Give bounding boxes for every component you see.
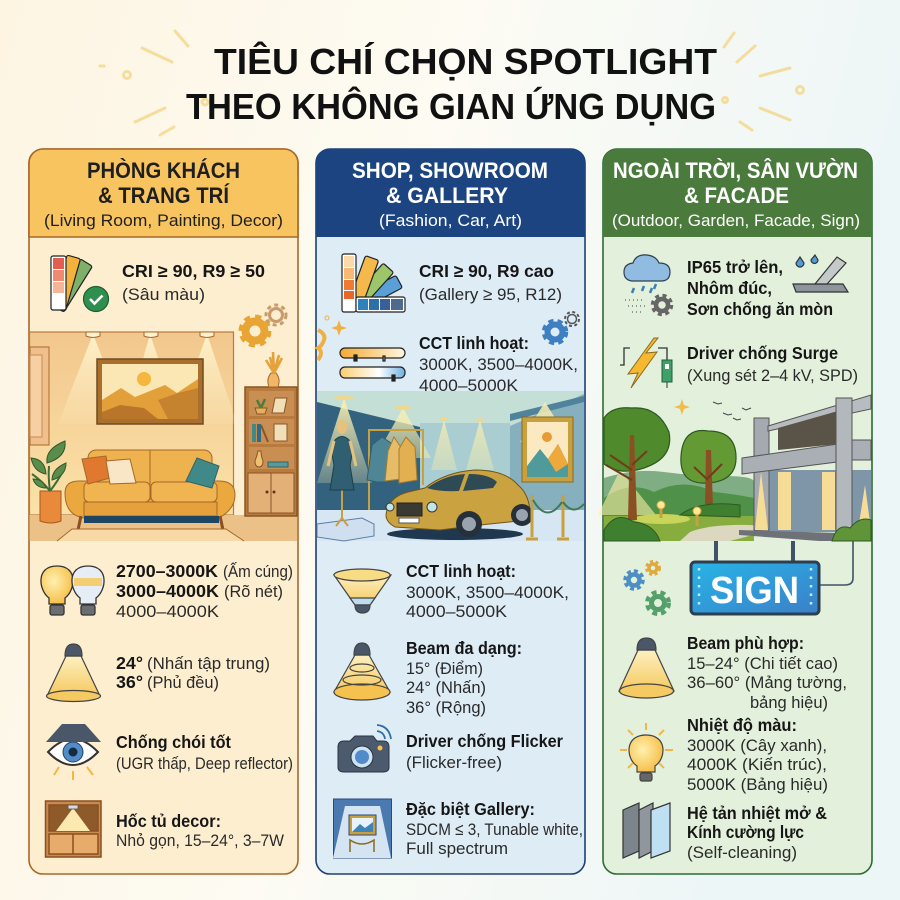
title [186,40,717,127]
text: CRI: CRI ≥ 90, R9 cao [419,261,554,281]
icon: gears [241,305,286,345]
panel header: outdoor: NGOÀI TRỜI, SÂN VƯỜN [613,158,858,183]
panel header: outdoor [603,149,872,237]
illustration: showroom [317,391,584,541]
text: beam: 15–24° (Chi tiết cao) [687,654,838,673]
text: anti-glare [116,732,293,773]
text: beam: bảng hiệu) [750,693,828,712]
text: colour temperature: 5000K (Bảng hiệu) [687,775,828,794]
text: CRI: CRI ≥ 90, R9 ≥ 50 [122,261,265,281]
text: heat sink: (Self-cleaning) [687,843,797,862]
text: CCT: 3000K, 3500–4000K, [419,355,578,374]
text: CRI: (Sâu màu) [122,285,205,304]
text: heat sink: Hệ tản nhiệt mở & [687,803,827,823]
text: beam range: Beam đa dạng: [406,638,522,658]
text: colour temperature [687,715,828,794]
illustration: garden and facade [598,395,871,541]
icon: camera [338,725,391,772]
text: flicker: (Flicker-free) [406,753,502,772]
icon: heat sink and tempered glass [623,803,670,858]
text: beam angles: 36° [116,672,143,692]
text: gallery: Đặc biệt Gallery: [406,799,535,819]
icon: lightning surge protection [620,338,672,388]
icon: beam cone [619,638,674,698]
panel header: living room [29,149,298,237]
icon: gallery room [333,799,392,858]
text: beam range: 15° (Điểm) [406,659,483,678]
panel header: shop: (Fashion, Car, Art) [379,211,522,230]
title: TIÊU CHÍ CHỌN SPOTLIGHT [214,40,717,82]
icon: decorative sparkle and gears [318,312,579,360]
icon: cloud, rain and gear [624,255,672,314]
text: IP65: Nhôm đúc, [687,278,772,298]
text: beam: Beam phù hợp: [687,633,804,653]
decorative sun rays around title [100,31,804,135]
text: CCT [419,333,578,395]
text: beam angles [116,653,270,692]
text: cabinet: Hốc tủ decor: [116,811,221,831]
text: beam range: 36° (Rộng) [406,698,486,717]
text: CCT flexible: 4000–5000K [406,602,508,621]
text: gallery [406,799,583,858]
text: surge [687,343,858,385]
icon: multi beam cone [334,643,390,700]
text: surge: (Xung sét 2–4 kV, SPD) [687,366,858,385]
text: CCT flexible: CCT linh hoạt: [406,561,516,581]
text: CRI [122,261,265,304]
icon: stacked lighting funnel [334,569,391,613]
text: beam range [406,638,522,717]
text: colour temperature: 3000–4000K [116,581,219,601]
panel: shop, showroom and gallery [316,149,585,874]
text: CRI [419,261,562,304]
icon: decor cabinet [46,801,101,857]
text: IP65: Sơn chống ăn mòn [687,299,833,319]
panel header: shop [316,149,585,237]
icon: light cone [46,644,100,702]
panel: outdoor, garden and facade [598,149,872,874]
panel header: shop: & GALLERY [386,183,508,208]
icon: colour temperature sliders [340,348,405,381]
text: beam range: 24° (Nhấn) [406,678,486,697]
text: colour temperature: 3000K (Cây xanh), [687,736,827,755]
title: THEO KHÔNG GIAN ỨNG DỤNG [186,85,716,127]
text: colour temperature [116,561,293,621]
panel header: shop: SHOP, SHOWROOM [352,158,548,183]
text: gallery: Full spectrum [406,839,508,858]
text: beam angles: 24° [116,653,143,673]
text: anti-glare: (UGR thấp, Deep reflector) [116,754,293,773]
icon: glowing bulb [620,723,673,781]
text: colour temperature: (Ấm cúng) [223,562,293,581]
text: CCT flexible [406,561,569,621]
text: colour temperature: (Rõ nét) [224,582,283,601]
icon: warm and neutral bulbs [41,566,104,615]
panel: living room and decor [29,149,298,874]
icon: aluminium plate with water drops [793,255,848,292]
text: flicker [406,731,563,772]
panel header: outdoor: (Outdoor, Garden, Facade, Sign) [612,211,860,230]
text: CCT: CCT linh hoạt: [419,333,529,353]
text: colour temperature: 2700–3000K [116,561,218,581]
panel header: outdoor: & FACADE [684,183,789,208]
text: cabinet [116,811,284,850]
illustration: living room [30,332,297,541]
text: IP65: IP65 trở lên, [687,257,783,277]
text: colour temperature: 4000K (Kiến trúc), [687,755,827,774]
text: colour temperature: Nhiệt độ màu: [687,715,797,735]
panel header: living room: (Living Room, Painting, Decor) [44,211,283,230]
text: gallery: SDCM ≤ 3, Tunable white, [406,820,583,839]
text: surge: Driver chống Surge [687,343,838,363]
text: beam angles: (Phủ đều) [147,673,219,692]
icon: SIGN board [691,541,853,614]
text: anti-glare: Chống chói tốt [116,732,231,752]
icon: gears [625,562,669,614]
icon: anti-glare eye [46,724,101,780]
text: CCT flexible: 3000K, 3500–4000K, [406,583,569,602]
text: colour temperature: 4000–4000K [116,602,220,621]
text: heat sink [687,803,827,862]
text: heat sink: Kính cường lực [687,822,804,842]
panel header: living room: & TRANG TRÍ [98,183,230,208]
icon: colour swatch fan [342,254,405,312]
panel header: living room: PHÒNG KHÁCH [87,158,240,183]
text: flicker: Driver chống Flicker [406,731,563,751]
text: IP65 [687,257,833,319]
text: beam [687,633,847,712]
text: beam: 36–60° (Mảng tường, [687,673,847,692]
icon: SIGN board: SIGN [710,570,799,612]
text: beam angles: (Nhấn tập trung) [147,654,270,673]
icon: colour swatch fan with check [51,255,108,312]
text: CCT: 4000–5000K [419,376,519,395]
text: cabinet: Nhỏ gọn, 15–24°, 3–7W [116,831,284,850]
text: CRI: (Gallery ≥ 95, R12) [419,285,562,304]
